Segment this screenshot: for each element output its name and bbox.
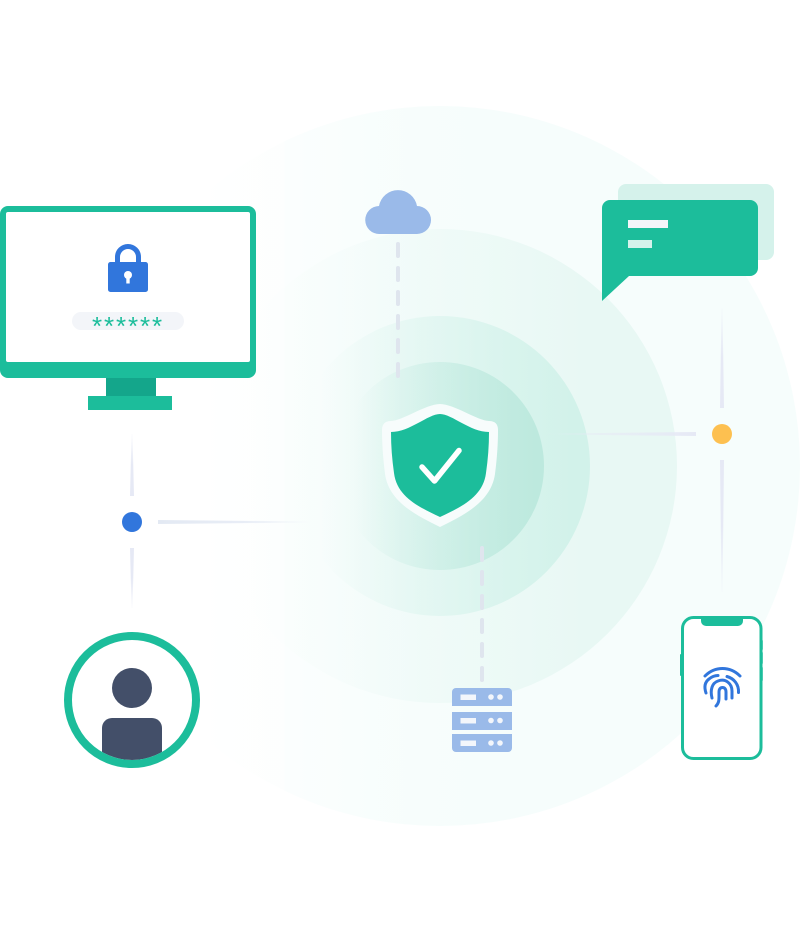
monitor screen: [6, 212, 250, 362]
icon: padlock: [108, 246, 148, 292]
shield outline: [382, 404, 498, 527]
phone body: [682, 618, 761, 758]
smartphone with fingerprint: [680, 617, 763, 758]
security network illustration: [0, 106, 800, 826]
monitor with lock screen: [0, 206, 256, 410]
concentric security rings: [80, 106, 800, 826]
connector: server to shield: [480, 546, 484, 682]
avatar ring: [68, 636, 196, 764]
bubble text line 2: [628, 240, 652, 248]
server unit middle: [452, 712, 512, 730]
connector lines: right node: [545, 308, 724, 592]
bubble text line 1: [628, 220, 668, 228]
chat bubbles: [602, 184, 774, 301]
icon: cloud: [365, 190, 431, 234]
password field: [72, 312, 184, 330]
avatar background: [70, 638, 194, 762]
check mark: [422, 450, 459, 481]
shield fill: [391, 414, 489, 517]
phone notch: [701, 617, 743, 626]
node: yellow dot: [712, 424, 732, 444]
password asterisks: ******: [92, 311, 164, 341]
connector: cloud to shield: [396, 242, 400, 378]
user avatar: [68, 636, 196, 788]
monitor body: [0, 206, 256, 378]
front bubble: [602, 200, 758, 301]
icon: fingerprint: [705, 668, 740, 706]
node: blue dot: [122, 512, 142, 532]
server rack: [452, 688, 512, 752]
phone side buttons: [680, 640, 763, 681]
monitor stand base: [88, 396, 172, 410]
back bubble: [618, 184, 774, 260]
server unit top: [452, 688, 512, 706]
avatar figure: [102, 668, 162, 760]
server unit bottom: [452, 734, 512, 752]
shield with check mark: [382, 404, 498, 527]
monitor stand neck: [106, 376, 156, 396]
connector lines: left node: [130, 434, 312, 608]
